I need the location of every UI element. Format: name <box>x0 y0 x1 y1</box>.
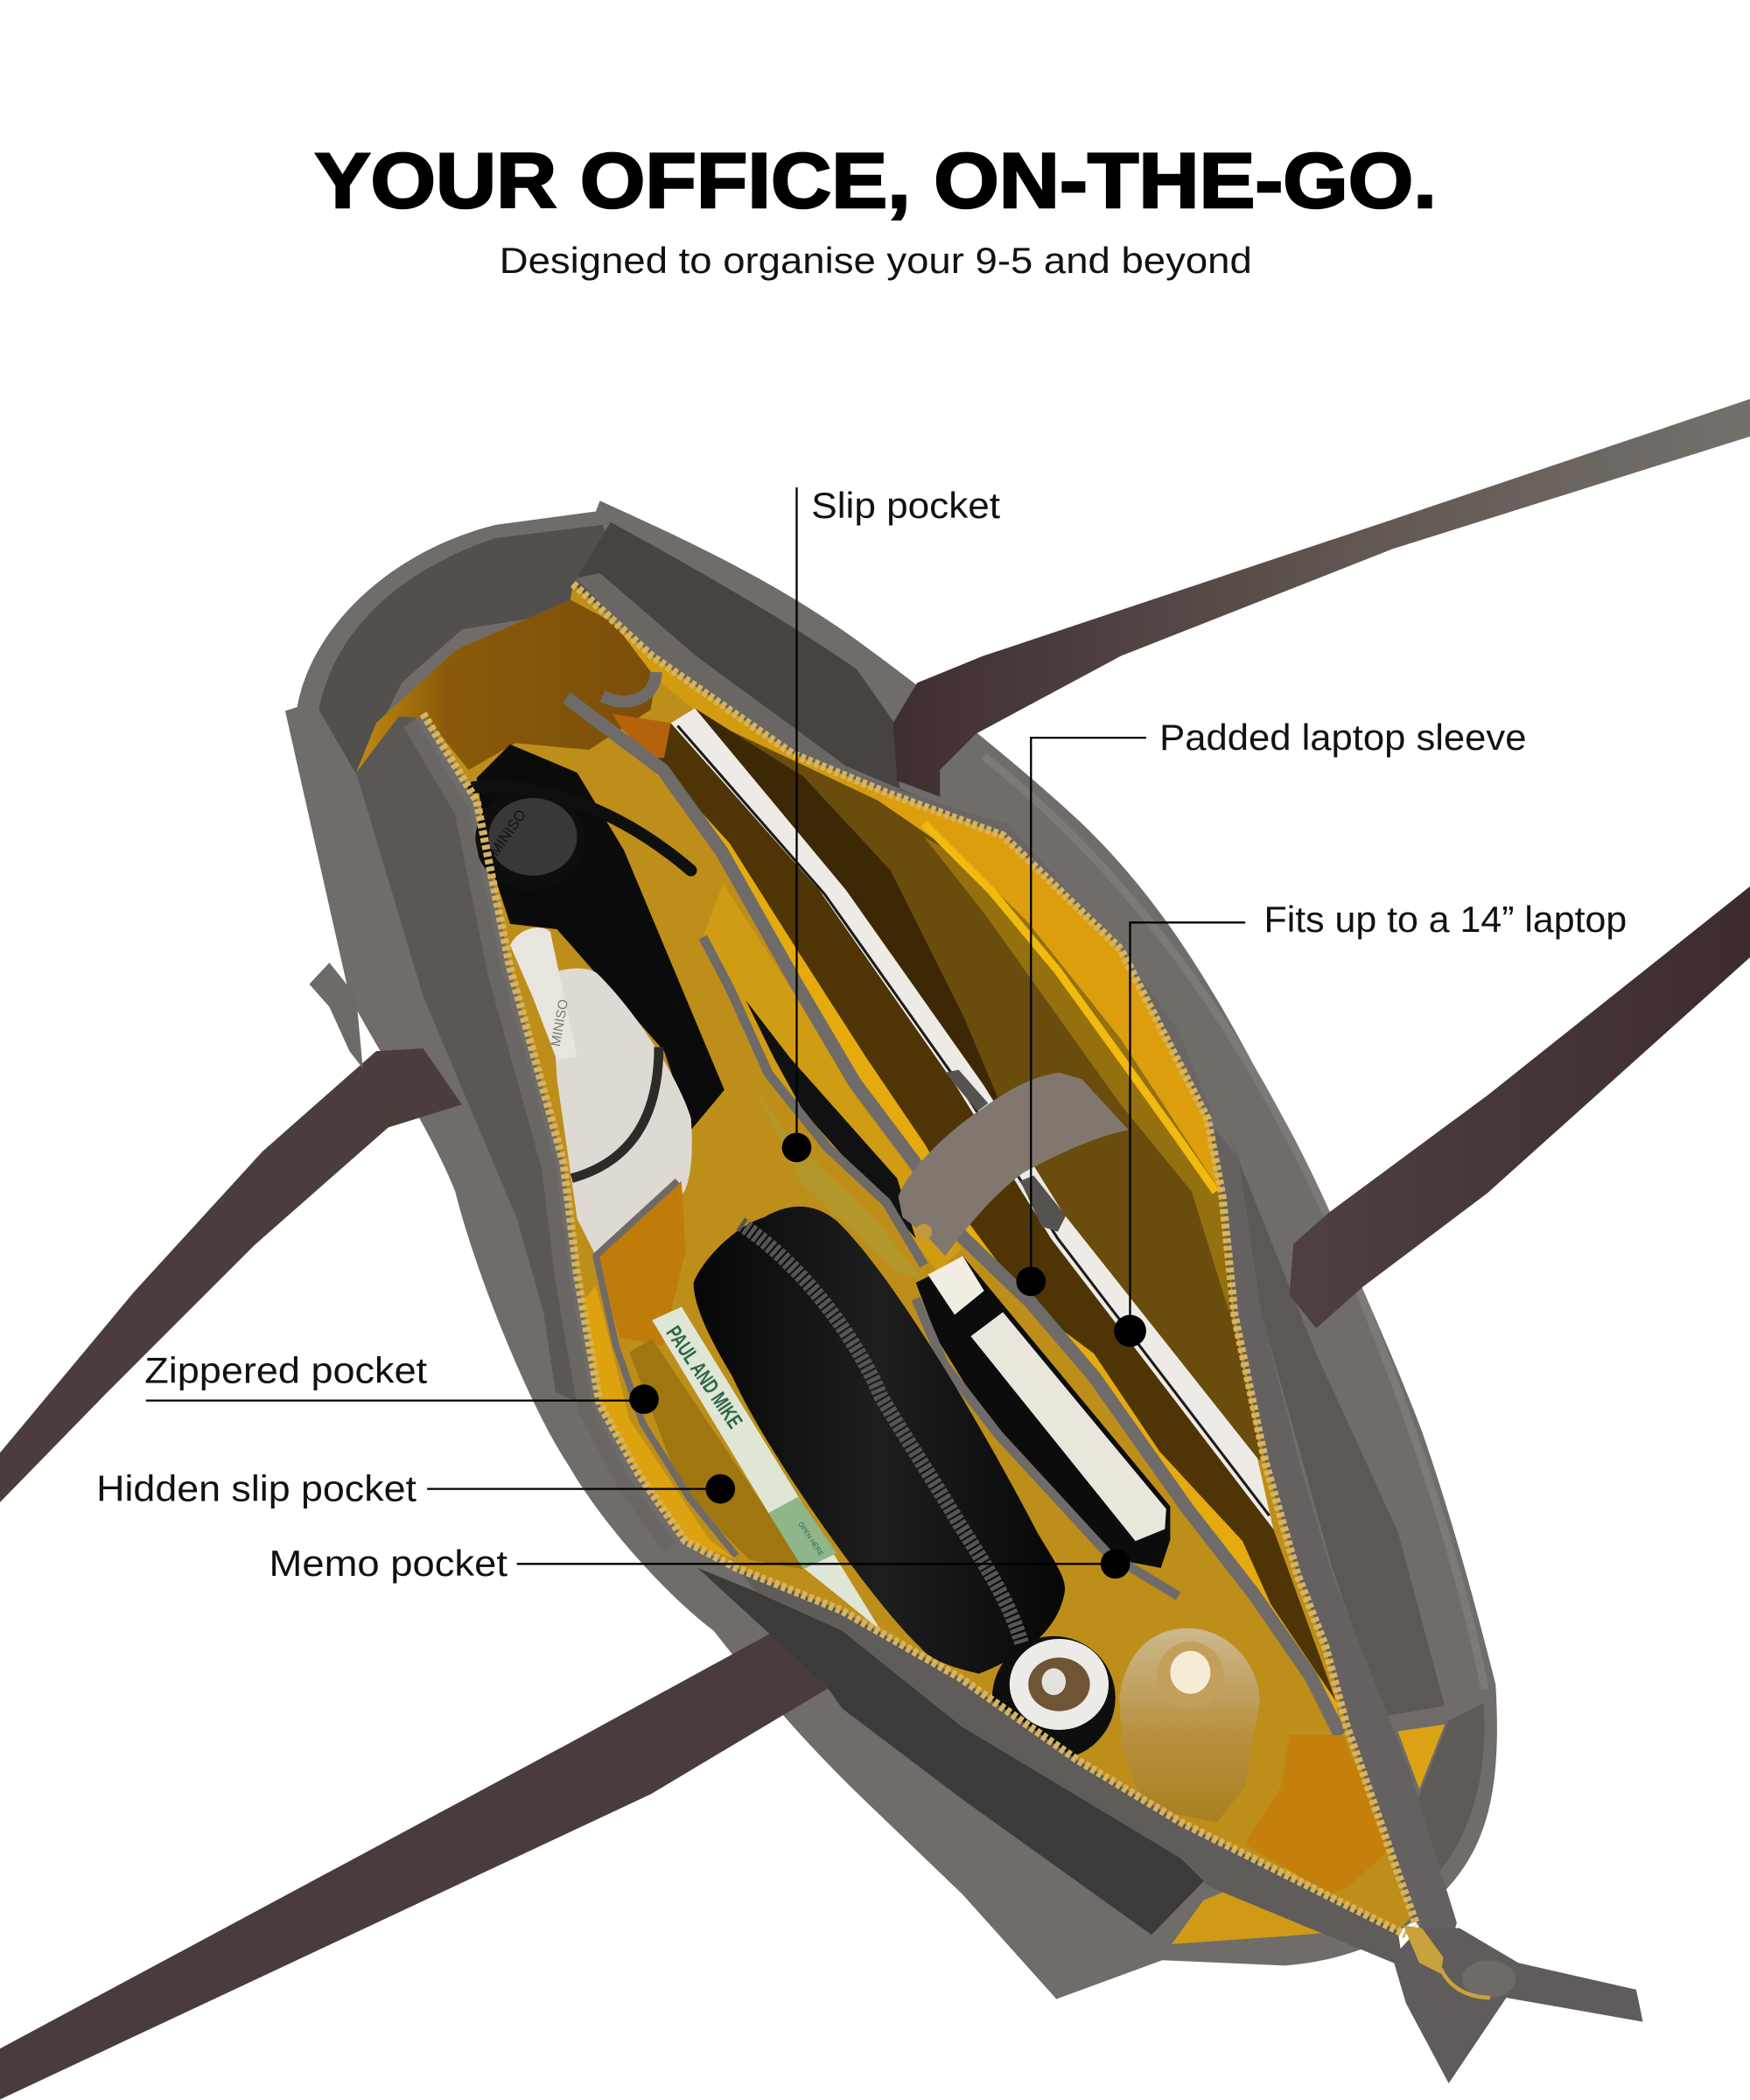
upper zip tape <box>576 573 1213 1119</box>
olive slip pocket panel <box>752 1084 921 1278</box>
bottle cap <box>475 788 585 891</box>
callout: zippered pocket <box>144 1351 659 1414</box>
main divider edge <box>566 697 1340 1735</box>
yellow satin lip <box>878 793 1225 1199</box>
right side panel <box>1227 1130 1445 1717</box>
left zip teeth <box>424 714 1406 1935</box>
white water bottle: MINISO <box>549 998 571 1047</box>
back long wall <box>578 522 1031 857</box>
divider loop <box>603 672 656 702</box>
callout: padded laptop sleeve: Padded laptop sleeve <box>1159 718 1526 758</box>
laptop strap <box>899 1073 1129 1256</box>
small zippered pocket fabric <box>596 1181 685 1346</box>
callout: fits up to a 14 inch laptop <box>1114 900 1627 1347</box>
strap: upper right <box>893 399 1750 796</box>
callout: zippered pocket: Zippered pocket <box>144 1351 428 1391</box>
interior lining <box>356 584 1412 1931</box>
bottle cap: MINISO <box>486 807 529 859</box>
black jar <box>992 1636 1116 1760</box>
bag body <box>285 500 1497 1999</box>
black umbrella <box>477 745 724 1130</box>
orange lining patch <box>612 714 671 758</box>
lower right zip tape <box>1208 1119 1457 1968</box>
end pocket satin <box>356 600 657 773</box>
left folded leather panel <box>356 717 586 1406</box>
back end wall <box>318 525 629 774</box>
black wrist strap <box>474 787 691 871</box>
callout: slip pocket: Slip pocket <box>811 486 1001 526</box>
paper memo packet <box>652 1306 881 1631</box>
inner rim of end wall <box>1346 1703 1484 1928</box>
right zip teeth <box>573 584 1417 1925</box>
bottom dark leather panel <box>697 1568 1205 1935</box>
strap: lower left <box>0 1631 830 2099</box>
dark shadow on sleeve wall <box>695 708 1020 1152</box>
callout: slip pocket <box>782 486 1001 1162</box>
yellow strip under zip <box>1172 1868 1386 1944</box>
strap: upper left <box>0 1048 462 1502</box>
title: YOUR OFFICE, ON-THE-GO. <box>315 137 1437 224</box>
subtitle: Designed to organise your 9-5 and beyond <box>500 241 1252 281</box>
ochre shadow by memo packet <box>629 1339 803 1569</box>
bright lining by zip <box>585 1285 737 1560</box>
callout: memo pocket <box>270 1544 1130 1584</box>
callout: hidden slip pocket <box>96 1468 735 1508</box>
lower zip tape <box>737 1568 1404 1967</box>
perfume bottle <box>1119 1628 1260 1823</box>
yellow padded sleeve <box>643 758 1340 1735</box>
paper memo packet: OPEN HERE <box>796 1520 825 1558</box>
callout: memo pocket: Memo pocket <box>270 1544 508 1584</box>
paper memo packet: PAUL AND MIKE <box>662 1322 746 1433</box>
left zip tape <box>410 723 669 1548</box>
lower orange satin corner <box>1245 1735 1391 1894</box>
strap: right <box>1290 886 1750 1328</box>
zip tail leather tab <box>1392 1928 1643 2083</box>
callout: padded laptop sleeve <box>1016 718 1526 1296</box>
gold rivet <box>916 1224 932 1240</box>
side tab knob <box>309 962 363 1068</box>
white water bottle <box>510 928 692 1258</box>
slip pocket edge <box>703 937 924 1265</box>
gold zip puller <box>1404 1925 1490 1998</box>
olive back wall of sleeve <box>695 708 1263 1462</box>
brown pocket beside laptop <box>652 723 1336 1702</box>
bright satin fold <box>924 823 1215 1192</box>
callout: fits up to a 14 inch laptop: Fits up to a 14” laptop <box>1264 900 1627 940</box>
knot on zip tail <box>1462 1960 1516 1998</box>
yellow band along upper zip <box>619 629 964 859</box>
notebook <box>916 1256 1170 1568</box>
small pocket edge <box>596 1181 737 1556</box>
ochre wall highlight <box>924 836 1229 1312</box>
callout: hidden slip pocket: Hidden slip pocket <box>96 1468 416 1508</box>
black zip pouch <box>694 1207 1065 1674</box>
laptop <box>671 708 1273 1530</box>
rim highlight <box>984 757 1485 1690</box>
gold panel between dividers <box>703 884 962 1272</box>
black phone in slip pocket <box>746 1000 916 1238</box>
notebook pocket edge <box>916 1298 1179 1596</box>
yellow strip at end corner <box>1398 1725 1445 1788</box>
